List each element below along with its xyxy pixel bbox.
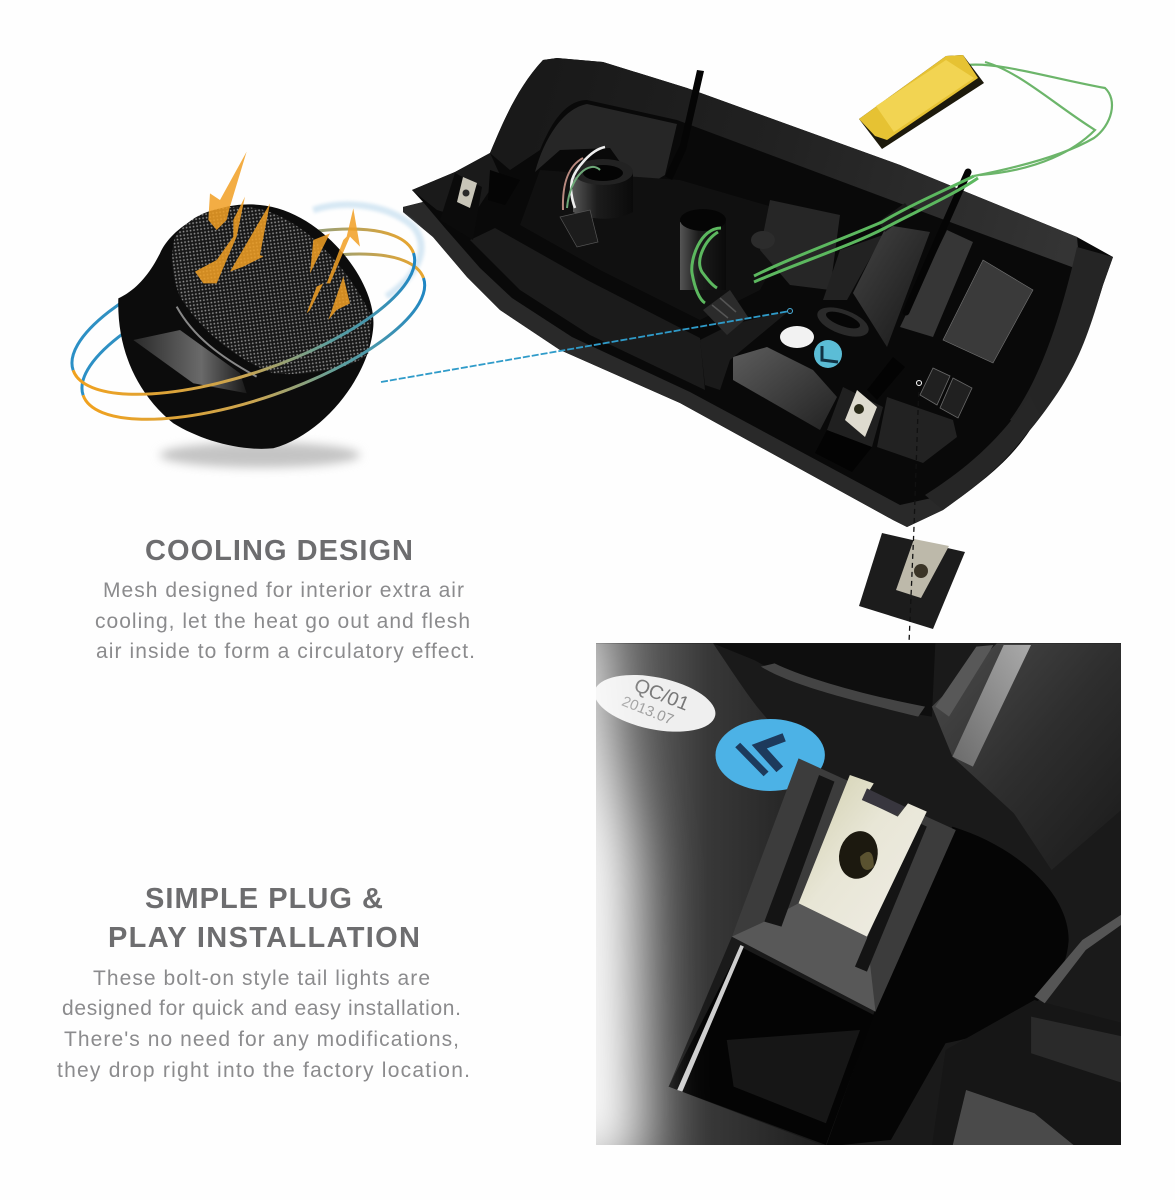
heading: simple plug and play installation: PLAY INSTALLATION — [108, 922, 420, 954]
flap — [412, 153, 500, 220]
text block: installation description: they drop right into the factory location. — [57, 1059, 470, 1082]
connector centre — [703, 290, 748, 335]
square panel — [943, 260, 1033, 363]
lower lip — [403, 202, 945, 527]
yellow module — [859, 55, 984, 149]
disc side highlight — [133, 330, 247, 393]
disc rim ring — [177, 307, 257, 377]
heading: simple plug and play installation: SIMPLE PLUG & — [145, 883, 383, 915]
text block: installation description: There's no need for any modifications, — [64, 1028, 459, 1051]
lower channel — [470, 228, 705, 390]
black dashed line: clip connection — [909, 380, 922, 643]
sticker: L — [814, 340, 842, 368]
wiring left socket — [563, 147, 605, 210]
left gray dome — [596, 643, 807, 1145]
text block: cooling description: air inside to form a circulatory effect. — [96, 640, 475, 663]
illustration: tail light housing back — [403, 55, 1113, 629]
dark arc band — [713, 643, 935, 717]
disc shadow — [160, 442, 360, 468]
post next to clip left — [488, 170, 520, 205]
centre plateau — [520, 170, 800, 320]
right flange — [1010, 247, 1113, 430]
left fade overlay — [596, 643, 690, 1145]
sticker: QC: QC/01 — [631, 674, 692, 716]
top rim band — [490, 58, 1080, 270]
text block: installation description: These bolt-on style tail lights are — [93, 967, 430, 990]
green wires to module — [967, 62, 1112, 176]
housing body silhouette — [403, 58, 1113, 527]
text block: cooling description: cooling, let the heat go out and flesh — [95, 610, 470, 633]
heading: cooling design: COOLING DESIGN — [145, 535, 413, 567]
clip plate — [732, 758, 956, 1012]
clip right — [815, 387, 883, 472]
sticker: QC — [780, 326, 814, 348]
connector inline — [878, 203, 912, 232]
sticker: QC — [596, 675, 716, 732]
dome gloss — [733, 347, 837, 430]
stud left — [665, 70, 704, 180]
ledge before dome — [700, 310, 790, 390]
gloss panels — [760, 200, 840, 290]
clip slots — [764, 775, 927, 972]
small boxes — [920, 368, 972, 418]
upper right gloss — [932, 643, 1125, 870]
mesh face — [172, 207, 372, 374]
lower right cell — [877, 397, 957, 463]
sockets: centre — [680, 209, 775, 290]
text block: cooling description — [95, 579, 475, 663]
black blob behind clip — [826, 827, 1069, 1147]
back arcs of rings — [53, 195, 423, 395]
heat flames — [195, 152, 360, 320]
text block: installation description: designed for quick and easy installation. — [62, 997, 461, 1020]
clip left — [440, 173, 482, 240]
metal clip — [799, 775, 927, 937]
text block: cooling description: Mesh designed for interior extra air — [103, 579, 464, 602]
heading: simple plug and play installation — [108, 883, 420, 954]
lower right shelf — [968, 1000, 1038, 1038]
sticker: QC: 2013.07 — [619, 694, 676, 729]
green wires on housing — [692, 176, 978, 303]
small clip part — [859, 533, 965, 629]
stud right — [906, 172, 968, 312]
chute below clip — [669, 947, 874, 1145]
inner upper plateau — [535, 104, 677, 190]
disc body — [118, 204, 373, 449]
illustration: cooling mesh disc — [53, 152, 444, 468]
text block: installation description — [57, 967, 470, 1082]
sticker: blue L — [715, 719, 825, 791]
blue dashed callout line — [381, 308, 792, 382]
panel: mounting clip close-up photo — [596, 643, 1121, 1145]
front arcs of rings — [73, 253, 444, 454]
connector left — [560, 210, 598, 247]
vent socket — [814, 301, 872, 343]
black block above right clip — [867, 357, 905, 400]
lower-right gloss edge — [925, 395, 1040, 510]
sockets: left — [573, 159, 633, 219]
airflow glow — [313, 205, 421, 297]
panel beside stud — [900, 230, 973, 337]
